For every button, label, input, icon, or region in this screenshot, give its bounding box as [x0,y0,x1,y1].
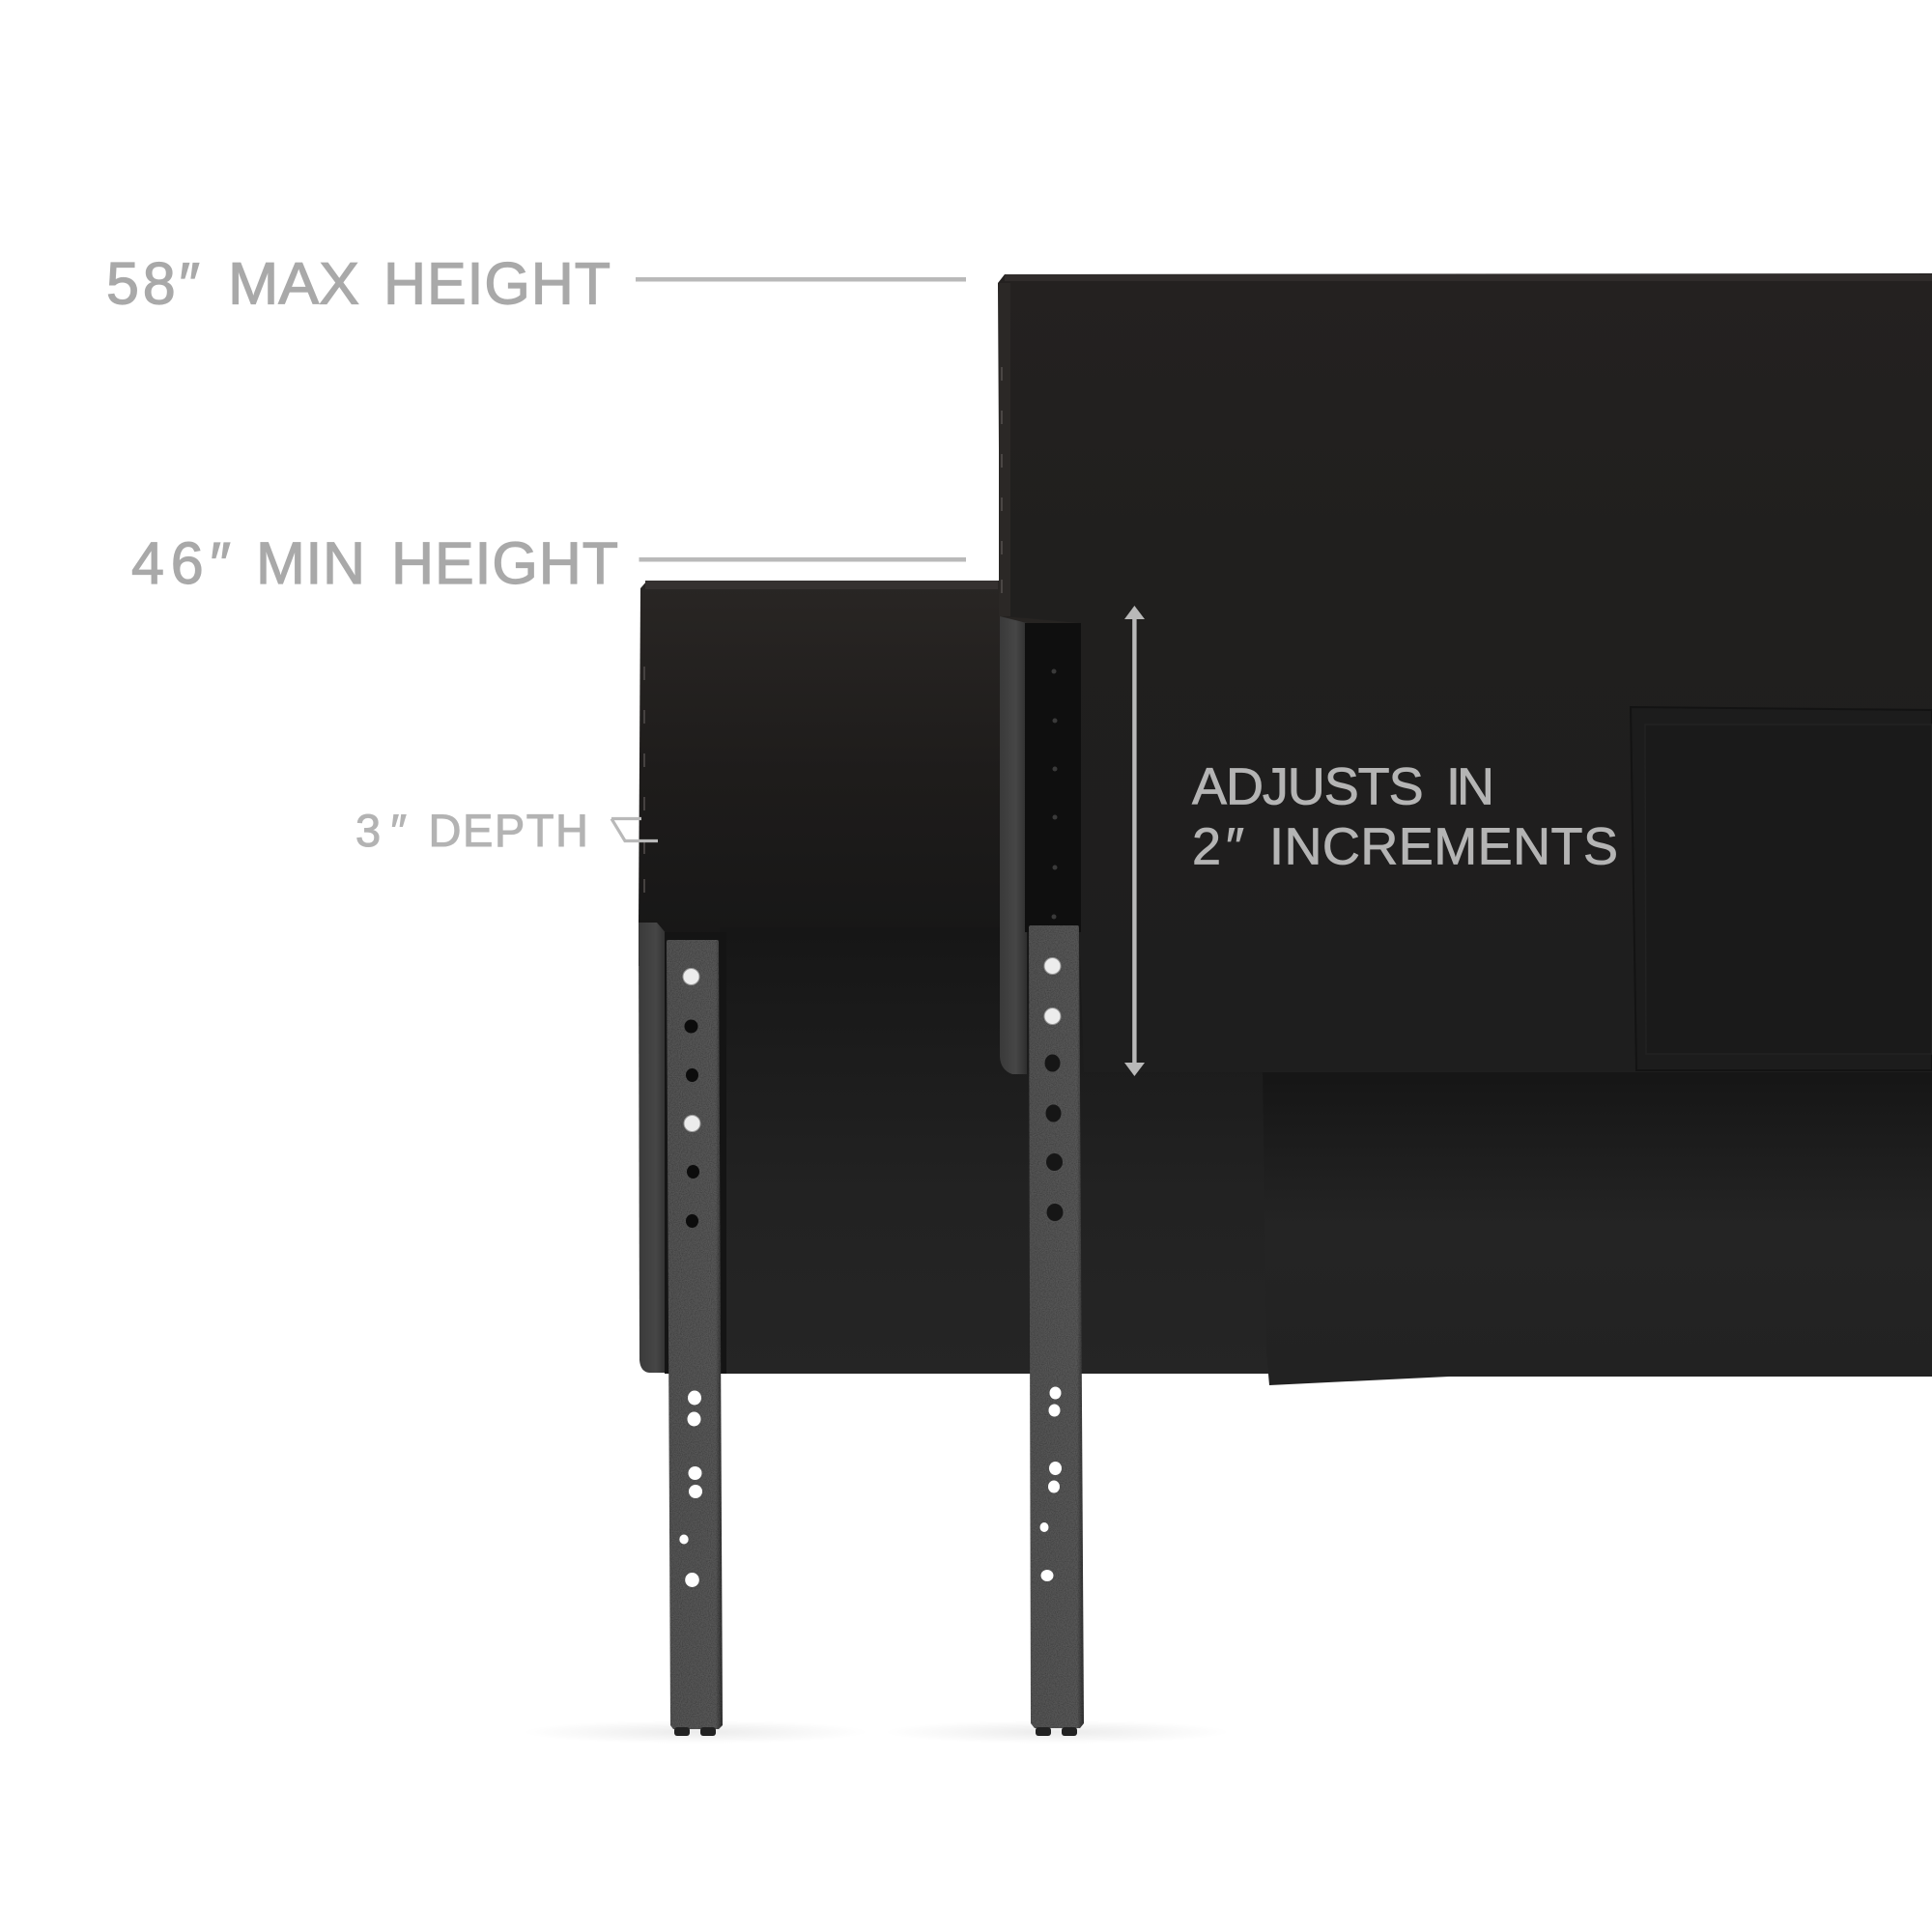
back support leg [667,940,723,1736]
back leg screws [683,968,700,1132]
label: 46 inch min height: MIN [256,530,365,596]
front headboard top seam [1005,274,1932,281]
back headboard lower panel [720,927,1270,1374]
front support leg [1029,925,1084,1736]
front leg open holes [1039,1387,1062,1581]
back headboard upper panel [639,581,1092,966]
pocket [1631,707,1932,1070]
floor shadow [522,1720,1231,1744]
front headboard at maximum height [998,273,1932,1074]
front slot channel [1025,623,1081,932]
label: 46 inch min height: HEIGHT [391,530,618,596]
back leg feet [674,1727,716,1736]
front side panel [1000,616,1027,1074]
back leg dark holes [684,1020,699,1228]
front headboard main panel [998,273,1932,1072]
label: adjusts in 2 inch increments: INCREMENTS [1269,817,1618,875]
front headboard left fold [999,283,1010,616]
label: 46 inch min height [131,530,618,596]
label: adjusts in 2 inch increments: 2″ [1192,817,1244,875]
label: 3 inch depth: DEPTH [429,805,588,856]
double arrow: height adjustment range [1124,606,1145,1076]
front leg body [1029,925,1084,1728]
back slot channel [665,932,726,1374]
front leg dark holes [1045,1055,1063,1221]
label: 58 inch max height: HEIGHT [384,251,611,317]
label: 3 inch depth: 3″ [355,805,407,856]
back headboard side edge [639,923,668,1373]
back headboard top seam [645,581,998,589]
front leg screws [1044,958,1061,1024]
leader line: min height [639,557,966,562]
label: 58 inch max height [106,251,611,317]
slot adjustment holes [1051,668,1057,920]
back leg body [667,940,723,1729]
label: 58 inch max height: MAX [228,251,359,317]
label: adjusts in 2 inch increments: ADJUSTS [1192,757,1424,815]
leader line: max height [636,277,966,282]
label: 58 inch max height: 58″ [106,251,200,317]
icon: depth bracket [611,819,658,840]
front leg feet [1036,1727,1077,1736]
bed skirt panel [1263,1067,1932,1385]
label: 3 inch depth [355,805,588,856]
label: adjusts in 2 inch increments: IN [1446,757,1494,815]
back headboard at minimum height [639,581,1270,1374]
back headboard stitches [643,667,645,893]
back leg open holes [679,1391,702,1587]
stitches on the left edge [1001,367,1003,593]
label: 46 inch min height: 46″ [131,530,231,596]
label: adjusts in 2 inch increments [1192,757,1618,875]
